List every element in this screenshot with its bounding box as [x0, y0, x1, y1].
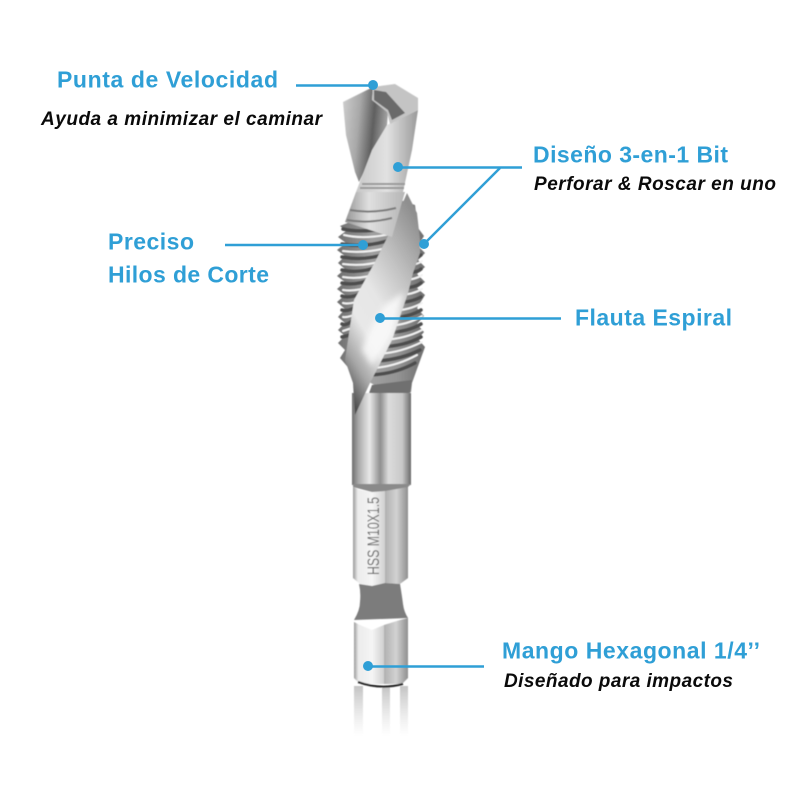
- callout: Diseño 3-en-1 Bit: Diseño 3-en-1 Bit: [533, 142, 728, 168]
- cone shoulder lines: [347, 208, 396, 222]
- threaded body: [337, 200, 425, 400]
- callout: Preciso Hilos de Corte: [108, 228, 368, 288]
- drill tip top face: [372, 84, 418, 124]
- callout: Punta de Velocidad: Punta de Velocidad: [57, 66, 278, 92]
- band on tip: [360, 184, 405, 188]
- drill bit illustration: [337, 84, 425, 736]
- callout: Diseño 3-en-1 Bit: [393, 142, 776, 249]
- drill tip left flute: [343, 87, 388, 182]
- callout: Preciso Hilos de Corte: Hilos de Corte: [108, 262, 269, 288]
- drill tip right land: [356, 110, 418, 192]
- hexagonal section upper: [353, 484, 411, 586]
- engraved size marking: HSS M10X1.5: [364, 497, 383, 575]
- shank: [352, 393, 411, 485]
- callout: Mango Hexagonal: Mango Hexagonal 1/4’’: [502, 638, 760, 664]
- mirror reflection: [354, 686, 408, 736]
- flute highlight: [362, 292, 404, 366]
- callout: Diseño 3-en-1 Bit: Perforar & Roscar en uno: [534, 174, 776, 195]
- hex neck groove: [354, 583, 408, 620]
- lower collar: [368, 380, 412, 396]
- callout: Punta de Velocidad: [40, 66, 378, 130]
- callout: Punta de Velocidad: Ayuda a minimizar el caminar: [40, 109, 324, 130]
- callout: Flauta Espiral: [375, 304, 732, 330]
- callout: Flauta Espiral: Flauta Espiral: [575, 304, 732, 330]
- cone: [345, 192, 405, 237]
- hexagonal section lower: [354, 618, 408, 687]
- callout: Mango Hexagonal: Diseñado para impactos: [504, 671, 733, 692]
- callout: Preciso Hilos de Corte: Preciso: [108, 228, 194, 254]
- spiral flute: [345, 193, 420, 415]
- callout: Mango Hexagonal: [363, 638, 760, 692]
